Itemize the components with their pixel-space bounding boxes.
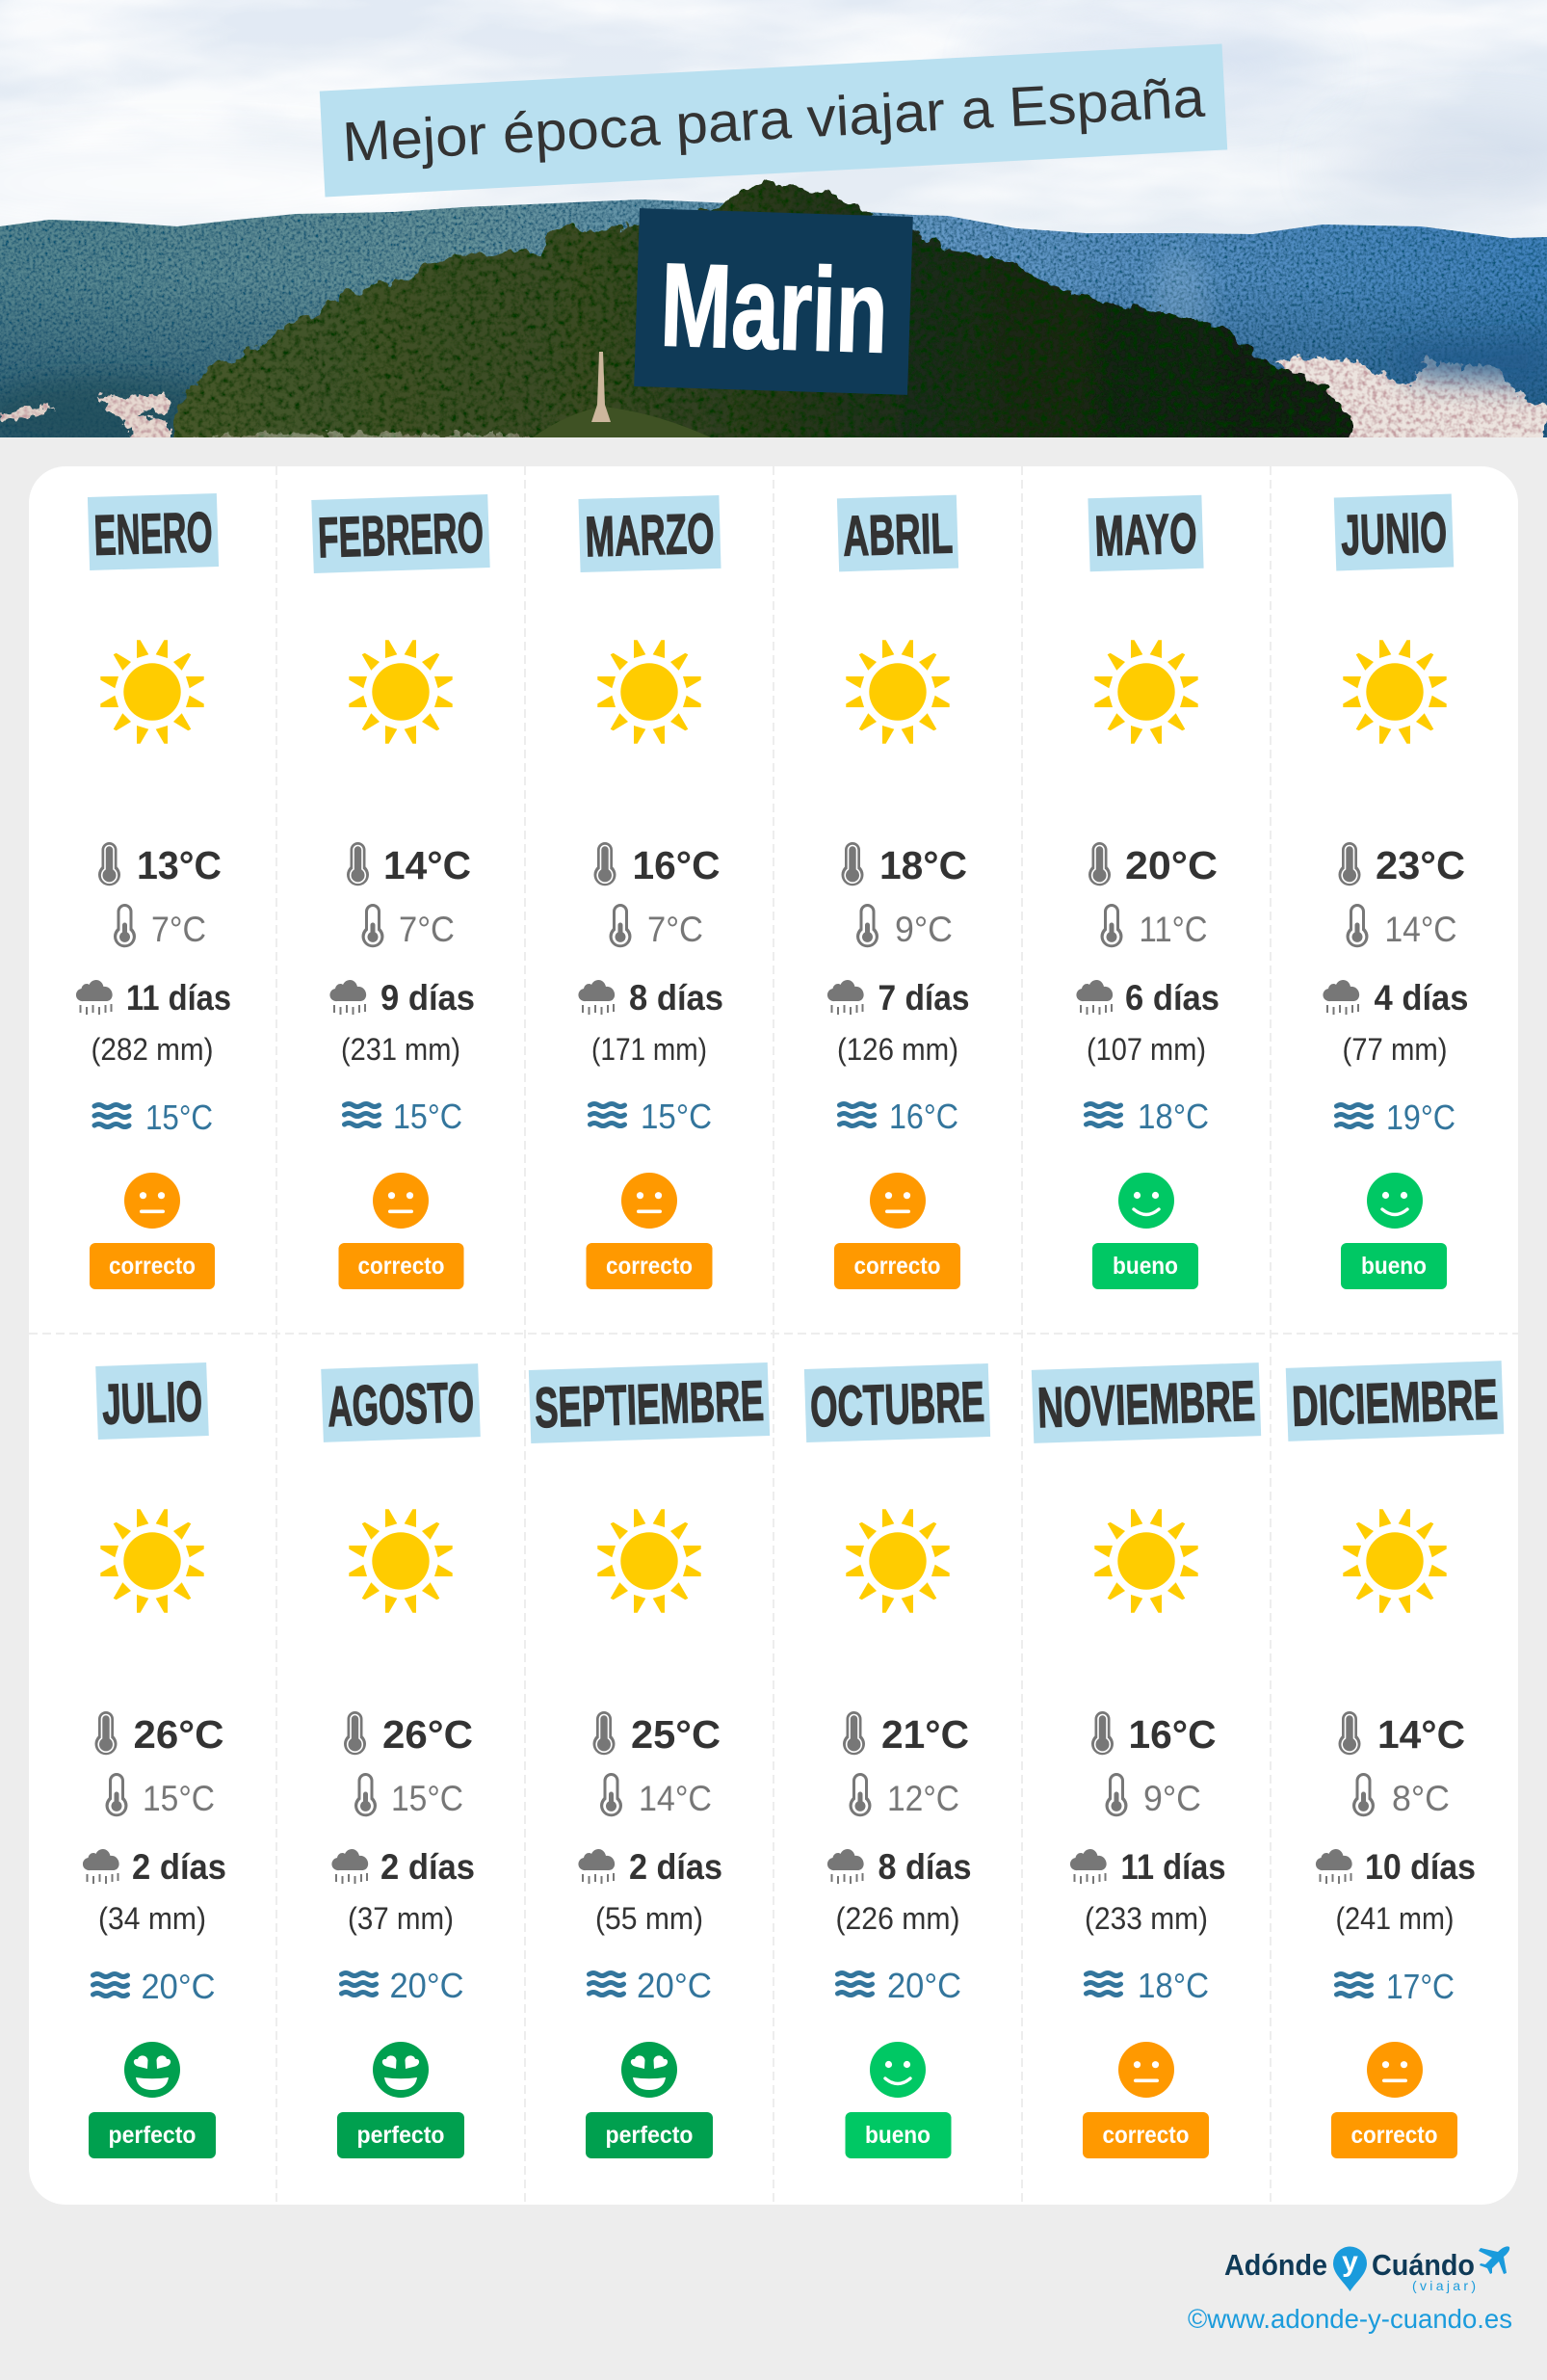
icon: sun — [100, 640, 204, 744]
icon: sun — [349, 640, 453, 744]
column: septiembre — [529, 1362, 770, 2158]
rating badge — [339, 1243, 464, 1289]
high temperature — [98, 842, 222, 887]
sea temperature: 20°C — [141, 1967, 216, 2006]
icon: sun — [846, 1509, 950, 1613]
sea temperature — [345, 1097, 462, 1136]
low temperature: 7°C — [151, 910, 206, 949]
high temperature: 23°C — [1376, 843, 1465, 887]
rating badge: bueno — [1113, 1253, 1178, 1280]
rating badge: correcto — [109, 1253, 196, 1280]
rating badge — [586, 2112, 713, 2158]
sea temperature — [590, 1097, 712, 1136]
rainfall: (171 mm) — [591, 1032, 707, 1067]
rating face — [1118, 2042, 1174, 2098]
high temperature: 14°C — [383, 843, 471, 887]
icon: airplane — [1479, 2246, 1509, 2274]
city name box: Marin — [659, 239, 890, 379]
sea temperature: 17°C — [1386, 1967, 1455, 2006]
rainy days — [1076, 978, 1219, 1018]
low temperature: 12°C — [887, 1779, 959, 1818]
low temperature — [362, 904, 455, 949]
high temperature — [94, 1711, 223, 1757]
rating badge — [337, 2112, 464, 2158]
high temperature — [593, 1711, 721, 1757]
rating face — [124, 2042, 180, 2098]
sea temperature — [341, 1966, 464, 2005]
rainfall: (107 mm) — [1087, 1032, 1206, 1067]
high temperature: 20°C — [1125, 843, 1218, 887]
rating badge — [586, 1243, 713, 1289]
month heading: SEPTIEMBRE — [529, 1362, 770, 1443]
low temperature — [1106, 1773, 1201, 1818]
high temperature: 18°C — [879, 843, 967, 887]
month heading: AGOSTO — [321, 1363, 481, 1442]
city name box — [634, 208, 913, 395]
column: marzo — [578, 495, 723, 1289]
sea temperature: 15°C — [393, 1097, 462, 1136]
low temperature: 11°C — [1139, 910, 1208, 949]
rating badge — [90, 1243, 215, 1289]
rainy days — [578, 978, 723, 1018]
month heading: MAYO — [1088, 495, 1204, 571]
icon: location pin — [1333, 2246, 1367, 2291]
low temperature — [1100, 904, 1208, 949]
month heading: ENERO: ENERO — [93, 500, 214, 568]
logo word: Adónde: Adónde — [1224, 2248, 1327, 2282]
rating badge — [846, 2112, 952, 2158]
rating badge — [89, 2112, 216, 2158]
month heading: OCTUBRE — [804, 1363, 990, 1442]
rating face — [870, 1173, 926, 1229]
column: diciembre — [1286, 1361, 1504, 2158]
month heading: JUNIO: JUNIO — [1340, 500, 1448, 568]
rainy days: 11 días — [1121, 1847, 1225, 1887]
title banner — [320, 44, 1227, 197]
rating badge: perfecto — [108, 2122, 197, 2149]
rainfall: (126 mm) — [837, 1032, 958, 1067]
rating badge: correcto — [358, 1253, 445, 1280]
sea temperature: 15°C — [641, 1097, 712, 1136]
sea temperature — [1087, 1097, 1209, 1136]
sea temperature: 18°C — [1138, 1966, 1209, 2005]
footer logo and credit — [1188, 2246, 1512, 2334]
rainy days — [1323, 978, 1468, 1018]
column: febrero — [311, 494, 490, 1289]
icon: sun — [597, 640, 701, 744]
rainy days — [1070, 1847, 1225, 1887]
icon: sun — [349, 1509, 453, 1613]
high temperature: 21°C — [881, 1712, 969, 1757]
low temperature: 7°C — [399, 910, 455, 949]
month heading: JULIO — [95, 1362, 209, 1440]
low temperature: 9°C — [895, 910, 953, 949]
column: junio — [1323, 493, 1468, 1289]
rating badge: correcto — [853, 1253, 940, 1280]
rating badge: perfecto — [605, 2122, 694, 2149]
website credit: ©www.adonde-y-cuando.es — [1188, 2304, 1512, 2334]
rainfall: (282 mm) — [91, 1032, 214, 1067]
rating face — [124, 1173, 180, 1229]
icon: sun — [1094, 640, 1198, 744]
rainy days: 2 días — [132, 1847, 226, 1887]
high temperature: 26°C — [382, 1712, 473, 1757]
month heading: JUNIO — [1334, 493, 1454, 571]
rainy days: 9 días — [380, 978, 475, 1018]
low temperature — [1347, 904, 1456, 949]
high temperature: 16°C — [632, 843, 721, 887]
icon: sun — [1094, 1509, 1198, 1613]
rating face — [1118, 1173, 1174, 1229]
low temperature: 15°C — [391, 1779, 463, 1818]
month heading: MAYO: MAYO — [1094, 501, 1198, 569]
rating badge — [1083, 2112, 1209, 2158]
rainy days — [76, 978, 231, 1018]
rainfall: (233 mm) — [1085, 1901, 1208, 1936]
rating face — [621, 1173, 677, 1229]
sea temperature: 18°C — [1138, 1097, 1209, 1136]
logo word: Cuándo: Cuándo — [1372, 2248, 1475, 2282]
rainy days: 7 días — [878, 978, 969, 1018]
rating badge: bueno — [1361, 1253, 1427, 1280]
low temperature — [114, 904, 206, 949]
column: abril — [827, 495, 969, 1289]
month heading: ABRIL — [837, 495, 958, 571]
rating badge — [1092, 1243, 1198, 1289]
sea temperature — [92, 1967, 216, 2006]
low temperature — [106, 1773, 215, 1818]
rating face — [870, 2042, 926, 2098]
high temperature — [347, 842, 471, 887]
month heading: FEBRERO: FEBRERO — [317, 501, 485, 569]
icon: sun — [100, 1509, 204, 1613]
column: julio — [83, 1362, 226, 2158]
rainfall: (226 mm) — [836, 1901, 959, 1936]
rainy days — [83, 1847, 226, 1887]
sea temperature: 20°C — [637, 1966, 712, 2005]
rating face — [373, 2042, 429, 2098]
title banner: Mejor época para viajar a España — [341, 66, 1207, 173]
rainy days: 8 días — [629, 978, 723, 1018]
sea temperature: 19°C — [1386, 1097, 1455, 1137]
rainy days: 6 días — [1125, 978, 1219, 1018]
low temperature — [600, 1773, 712, 1818]
high temperature: 25°C — [631, 1712, 721, 1757]
rainy days — [827, 978, 969, 1018]
month heading: OCTUBRE: OCTUBRE — [809, 1370, 985, 1439]
rainy days — [578, 1847, 722, 1887]
month heading: JULIO: JULIO — [101, 1369, 203, 1437]
high temperature — [843, 1711, 969, 1757]
high temperature — [593, 842, 721, 887]
rainy days: 2 días — [380, 1847, 475, 1887]
rating face — [373, 1173, 429, 1229]
column: enero — [76, 493, 231, 1289]
sea temperature — [94, 1097, 213, 1137]
rainfall: (34 mm) — [98, 1901, 206, 1936]
icon: sun — [1343, 1509, 1447, 1613]
icon: sun — [597, 1509, 701, 1613]
rainfall: (55 mm) — [595, 1901, 703, 1936]
month heading: NOVIEMBRE — [1032, 1362, 1261, 1443]
low temperature — [354, 1773, 463, 1818]
icon: sun — [846, 640, 950, 744]
column: noviembre — [1032, 1362, 1261, 2158]
low temperature: 8°C — [1392, 1779, 1450, 1818]
low temperature: 15°C — [143, 1779, 215, 1818]
sea temperature: 15°C — [145, 1097, 213, 1137]
rainfall: (77 mm) — [1343, 1032, 1447, 1067]
panel: monthly calendar card — [29, 466, 1518, 2205]
rainfall: (231 mm) — [341, 1032, 460, 1067]
column: mayo — [1076, 495, 1219, 1289]
low temperature — [856, 904, 953, 949]
rainfall: (37 mm) — [348, 1901, 454, 1936]
high temperature: 14°C — [1377, 1712, 1465, 1757]
rainy days — [1316, 1847, 1476, 1887]
rating badge: correcto — [1102, 2122, 1189, 2149]
rainy days — [331, 1847, 475, 1887]
rating face — [1367, 2042, 1423, 2098]
sea temperature — [840, 1097, 958, 1136]
low temperature: 14°C — [1385, 910, 1456, 949]
sea temperature: 16°C — [889, 1097, 958, 1136]
month heading: NOVIEMBRE: NOVIEMBRE — [1036, 1369, 1256, 1440]
month heading: SEPTIEMBRE: SEPTIEMBRE — [534, 1369, 765, 1440]
rainfall: (241 mm) — [1335, 1901, 1455, 1936]
month heading: FEBRERO — [311, 494, 490, 573]
sea temperature — [838, 1966, 961, 2005]
low temperature — [1352, 1773, 1450, 1818]
sea temperature — [590, 1966, 712, 2005]
icon: sun — [1343, 640, 1447, 744]
high temperature — [1088, 842, 1218, 887]
rainy days: 11 días — [126, 978, 231, 1018]
sea temperature: 20°C — [887, 1966, 961, 2005]
month heading: AGOSTO: AGOSTO — [327, 1370, 475, 1439]
rainy days: 4 días — [1374, 978, 1468, 1018]
high temperature — [842, 842, 967, 887]
low temperature: 14°C — [639, 1779, 712, 1818]
rating badge — [1341, 1243, 1447, 1289]
rating badge: correcto — [1350, 2122, 1437, 2149]
low temperature — [850, 1773, 959, 1818]
sea temperature: 20°C — [389, 1966, 464, 2005]
rating face — [621, 2042, 677, 2098]
column: agosto — [321, 1363, 481, 2158]
rainy days — [827, 1847, 971, 1887]
high temperature: 26°C — [133, 1712, 223, 1757]
low temperature — [609, 904, 703, 949]
rating face — [1367, 1173, 1423, 1229]
rating badge — [834, 1243, 960, 1289]
month heading: MARZO: MARZO — [585, 502, 715, 569]
column: octubre — [804, 1363, 990, 2158]
high temperature: 16°C — [1129, 1712, 1216, 1757]
high temperature: 13°C — [137, 843, 222, 887]
rating badge — [1331, 2112, 1457, 2158]
rainy days — [329, 978, 475, 1018]
high temperature — [1339, 1711, 1465, 1757]
rainy days: 8 días — [878, 1847, 971, 1887]
low temperature: 7°C — [647, 910, 703, 949]
rating badge: correcto — [606, 1253, 693, 1280]
sea temperature — [1337, 1967, 1455, 2006]
high temperature — [344, 1711, 473, 1757]
logo subtitle: (viajar) — [1412, 2278, 1476, 2293]
rating badge: bueno — [865, 2122, 931, 2149]
rainy days: 10 días — [1365, 1847, 1476, 1887]
sea temperature — [1087, 1966, 1209, 2005]
low temperature: 9°C — [1143, 1779, 1201, 1818]
month heading: ENERO — [88, 493, 219, 570]
high temperature — [1091, 1711, 1216, 1757]
rainy days: 2 días — [629, 1847, 722, 1887]
month heading: ABRIL: ABRIL — [842, 501, 954, 569]
month heading: MARZO — [578, 495, 721, 572]
header photo: sky, mountains, wooded hill and towns — [0, 0, 1547, 463]
sea temperature — [1337, 1097, 1455, 1137]
rating badge: perfecto — [356, 2122, 445, 2149]
high temperature — [1339, 842, 1465, 887]
icon: location pin: y — [1342, 2246, 1358, 2278]
